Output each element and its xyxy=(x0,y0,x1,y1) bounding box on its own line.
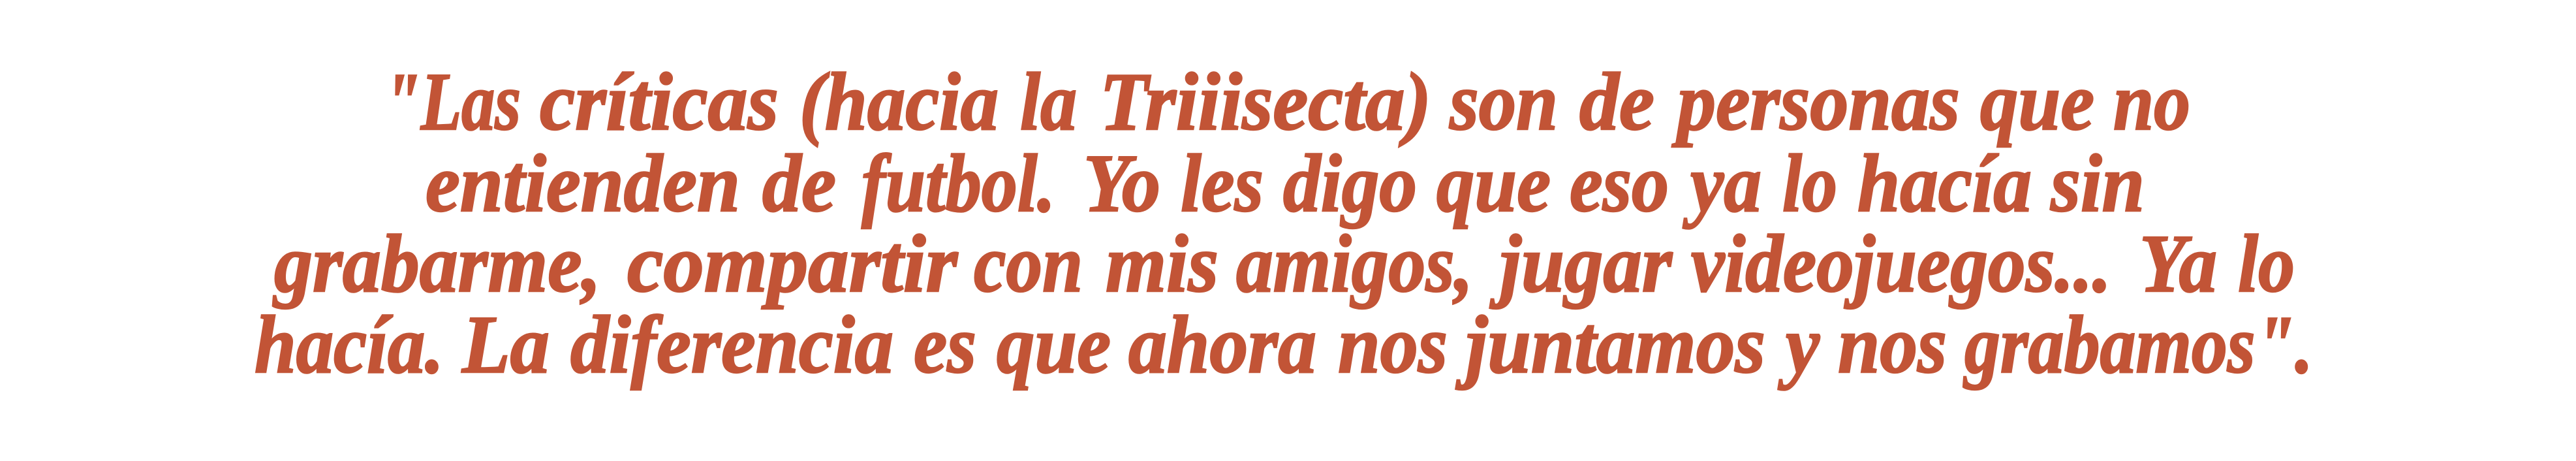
quote line 1: personas xyxy=(1672,57,1960,148)
quote line 1: que xyxy=(1980,57,2094,148)
quote line 2: ya xyxy=(1683,138,1761,229)
quote line 2: de xyxy=(762,138,836,229)
quote line 2: hacía xyxy=(1857,138,2032,229)
quote line 1: Triiisecta) xyxy=(1100,57,1431,148)
quote line 4: es xyxy=(914,300,976,390)
quote line 4: grabamos". xyxy=(1963,300,2313,390)
quote line 2: digo xyxy=(1283,138,1417,229)
quote line 4: que xyxy=(997,300,1111,390)
quote line 2: sin xyxy=(2050,138,2145,229)
quote line 4 xyxy=(255,300,2313,390)
quote line 3: videojuegos... xyxy=(1691,219,2111,310)
quote line 2: lo xyxy=(1782,138,1837,229)
quote line 3: amigos, xyxy=(1236,219,1473,310)
quote line 1: críticas xyxy=(540,57,779,148)
quote line 3: con xyxy=(974,219,1083,310)
quote line 1: no xyxy=(2113,57,2190,148)
quote line 3: Ya xyxy=(2139,219,2217,310)
quote line 4: juntamos xyxy=(1455,300,1765,390)
quote line 3: lo xyxy=(2238,219,2295,310)
quote line 2 xyxy=(426,138,2145,229)
quote line 3 xyxy=(272,219,2295,310)
quote line 4: hacía. xyxy=(255,300,444,390)
quote line 4: diferencia xyxy=(570,300,893,390)
quote line 1 xyxy=(384,57,2190,148)
quote line 2: Yo xyxy=(1083,138,1160,229)
quote line 1: de xyxy=(1579,57,1654,148)
quote line 4: nos xyxy=(1338,300,1448,390)
quote line 4: ahora xyxy=(1128,300,1316,390)
quote line 4: y xyxy=(1778,300,1820,390)
quote line 3: jugar xyxy=(1489,219,1673,310)
quote line 1: la xyxy=(1020,57,1077,148)
quote line 2: futbol. xyxy=(861,138,1055,229)
quote line 3: grabarme, xyxy=(272,219,601,310)
quote line 2: que xyxy=(1436,138,1551,229)
quote line 2: les xyxy=(1181,138,1264,229)
quote line 1: son xyxy=(1449,57,1558,148)
quote line 1: (hacia xyxy=(799,57,999,148)
quote line 3: mis xyxy=(1106,219,1218,310)
quote line 2: eso xyxy=(1570,138,1669,229)
quote line 4: nos xyxy=(1838,300,1947,390)
quote line 1: "Las xyxy=(384,57,521,148)
quote line 4: La xyxy=(461,300,550,390)
quote line 2: entienden xyxy=(426,138,740,229)
quote line 3: compartir xyxy=(627,219,958,310)
